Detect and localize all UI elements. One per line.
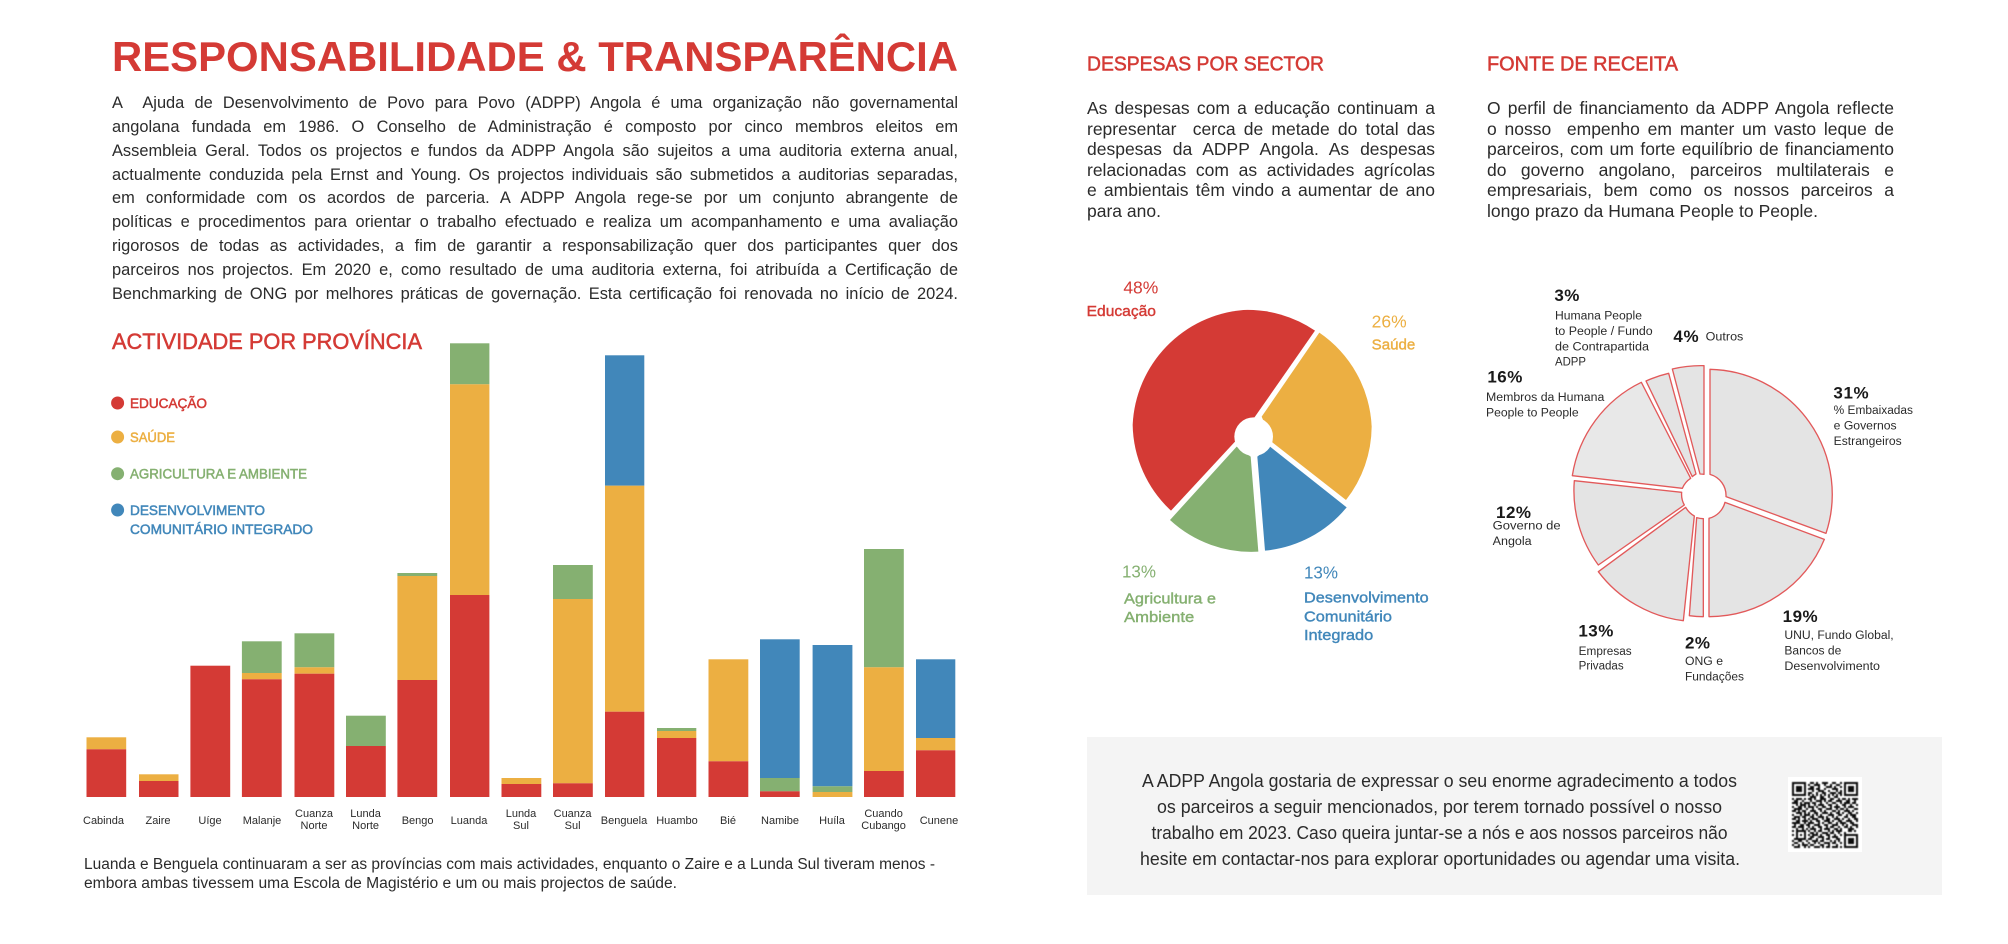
- label: 3% humana people to people: de Contrapartida: [1555, 339, 1649, 353]
- text block: despesas: e ambientais têm vindo a aumentar de ano: [1087, 180, 1435, 200]
- province axis labels: Uíge: [198, 815, 222, 827]
- thank-you text: trabalho em 2023. Caso queira juntar-se a nós e aos nossos parceiros não: [1152, 823, 1728, 843]
- label: 3% humana people to people: to People / Fundo: [1555, 324, 1653, 338]
- label: desenvolvimento comunitario integrado: 13%: [1304, 562, 1338, 582]
- bar: Cunene: [916, 659, 955, 797]
- label: educacao: Educação: [1087, 303, 1156, 320]
- label: 4% outros: [1673, 327, 1743, 346]
- heading: despesas por sector: DESPESAS POR SECTOR: [1087, 54, 1324, 76]
- text block: despesas: [1087, 98, 1435, 221]
- thank-you text: os parceiros a seguir mencionados, por terem tornado possível o nosso: [1157, 797, 1722, 817]
- label: 4% outros: 4%: [1673, 327, 1699, 346]
- province axis labels: Cunene: [920, 815, 958, 827]
- label: 2% ONG: ONG e: [1685, 654, 1723, 668]
- province axis labels: Lunda: [506, 808, 537, 820]
- label: saude: [1372, 312, 1415, 353]
- province axis labels: Lunda: [350, 808, 382, 820]
- centre hole: [1234, 417, 1273, 456]
- province axis labels: Cuanza: [295, 808, 334, 820]
- province axis labels: Benguela: [601, 815, 648, 827]
- label: agricultura e ambiente: Ambiente: [1124, 609, 1194, 626]
- province axis labels: Huíla: [819, 815, 846, 827]
- label: 13% empresas: [1578, 622, 1632, 672]
- slice: educacao 48%: [1133, 310, 1315, 511]
- label: 16% membros: 16%: [1487, 368, 1522, 387]
- province axis labels: Cuanza: [554, 808, 592, 820]
- pie chart: fonte de receita: [1486, 286, 1913, 684]
- slice: desenvolvimento 13%: [1257, 447, 1347, 551]
- slice: 19% UNU: [1709, 502, 1824, 617]
- label: 12% governo: Angola: [1493, 534, 1532, 548]
- thank-you text: A ADPP Angola gostaria de expressar o seu enorme agradecimento a todos: [1142, 771, 1737, 791]
- text block: fonte de receita: [1487, 98, 1894, 221]
- province axis labels: Luanda: [451, 815, 488, 827]
- province axis labels: Bengo: [402, 815, 434, 827]
- thank-you text: hesite em contactar-nos para explorar oportunidades ou agendar uma visita.: [1140, 849, 1740, 869]
- label: 12% governo: Governo de: [1493, 519, 1561, 533]
- pie chart: despesas por sector: [1087, 277, 1429, 644]
- intro text block: rigorosos de todas as actividades, a fim de garantir a responsabilização quer dos participantes quer dos: [112, 237, 958, 255]
- label: 19% UNU: 19%: [1783, 607, 1818, 626]
- label: 16% membros: [1486, 368, 1605, 419]
- label: desenvolvimento comunitario integrado: Integrado: [1304, 627, 1373, 644]
- intro text block: políticas e procedimentos para orientar o trabalho efectuado e realiza um acompanhamento e uma avaliação: [112, 213, 958, 231]
- province axis labels: Huambo: [656, 815, 698, 827]
- bar: Malanje: [242, 641, 282, 797]
- slice: 2% ONG: [1689, 518, 1703, 617]
- bar: Zaire: [139, 774, 178, 797]
- stacked bar chart: activity by province: [86, 343, 955, 797]
- bar: Bengo: [397, 573, 437, 797]
- label: 4% outros: Outros: [1706, 330, 1743, 344]
- label: 2% ONG: Fundações: [1685, 670, 1744, 684]
- chart caption: Luanda e Benguela continuaram a ser as províncias com mais actividades, enquanto o Zaire e a Lunda Sul tiveram menos -: [84, 856, 935, 873]
- label: desenvolvimento comunitario integrado: Comunitário: [1304, 608, 1392, 625]
- legend item: agricultura e ambiente: AGRICULTURA E AMBIENTE: [130, 466, 307, 482]
- label: agricultura e ambiente: 13%: [1122, 562, 1156, 582]
- intro text block: Benchmarking de ONG por melhores práticas de governação. Esta certificação foi renovada no início de 2024.: [112, 285, 958, 303]
- text block: despesas: representar cerca de metade do total das: [1087, 119, 1435, 139]
- text block: fonte de receita: longo prazo da Humana People to People.: [1487, 201, 1818, 221]
- bar: Cuanza Norte: [294, 633, 334, 797]
- intro text block: A Ajuda de Desenvolvimento de Povo para Povo (ADPP) Angola é uma organização não governamental: [112, 94, 958, 112]
- province axis labels: Cuando: [864, 808, 903, 820]
- label: 16% membros: People to People: [1486, 405, 1579, 419]
- label: 2% ONG: [1685, 634, 1744, 684]
- province axis labels: Cabinda: [83, 815, 125, 827]
- intro text block: actualmente conduzida pela Ernst and Young. Os projectos individuais são submetidos a auditorias separadas,: [112, 166, 958, 184]
- label: desenvolvimento comunitario integrado: [1304, 562, 1429, 644]
- slices: [1572, 366, 1832, 621]
- province axis labels: Namibe: [761, 815, 799, 827]
- label: educacao: [1087, 277, 1158, 320]
- chart caption: [84, 856, 935, 892]
- bar: Cuando Cubango: [864, 549, 904, 797]
- panel: thank-you box: [1087, 737, 1942, 895]
- province axis labels: Zaire: [145, 815, 171, 827]
- bar: Uige: [190, 666, 230, 797]
- slice: 16% membros: [1572, 382, 1691, 488]
- label: 3% humana people to people: [1554, 286, 1653, 369]
- label: agricultura e ambiente: Agricultura e: [1124, 591, 1216, 608]
- bar: Namibe: [760, 639, 800, 797]
- text block: despesas: relacionadas com as actividades agrícolas: [1087, 160, 1435, 180]
- intro text block: em conformidade com os acordos de parceria. A ADPP Angola rege-se por um conjunto abrangente de: [112, 189, 958, 207]
- legend item: desenvolvimento comunitario integrado: [111, 503, 313, 537]
- label: agricultura e ambiente: [1122, 562, 1216, 626]
- bar: Cuanza Sul: [553, 565, 593, 797]
- label: 12% governo: [1493, 503, 1561, 548]
- label: 3% humana people to people: ADPP: [1555, 355, 1586, 369]
- province axis labels: Norte: [352, 820, 379, 832]
- label: 13% empresas: 13%: [1578, 622, 1613, 641]
- label: 12% governo: 12%: [1496, 503, 1531, 522]
- label: 19% UNU: [1783, 607, 1894, 673]
- province axis labels: Bié: [720, 815, 736, 827]
- slice: saude 26%: [1262, 333, 1372, 500]
- province axis labels: Sul: [513, 820, 529, 832]
- province axis labels: Malanje: [243, 815, 281, 827]
- province axis labels: Norte: [301, 820, 327, 832]
- label: saude: 26%: [1372, 312, 1407, 332]
- slice: agricultura 13%: [1170, 447, 1258, 552]
- text block: fonte de receita: parceiros, com um forte equilíbrio de financiamento: [1487, 139, 1894, 159]
- bar: Benguela: [605, 355, 644, 797]
- bar: Luanda: [450, 343, 489, 797]
- label: 19% UNU: Desenvolvimento: [1784, 659, 1880, 673]
- label: 31% embaixadas: [1833, 383, 1913, 448]
- label: desenvolvimento comunitario integrado: Desenvolvimento: [1304, 590, 1429, 607]
- province axis labels: [83, 808, 958, 832]
- intro text block: parceiros nos projectos. Em 2020 e, como resultado de uma auditoria externa, foi atribuída a Certificação de: [112, 261, 958, 279]
- title: RESPONSABILIDADE & TRANSPARÊNCIA: [112, 32, 958, 80]
- province axis labels: Sul: [565, 820, 581, 832]
- label: educacao: 48%: [1123, 277, 1158, 297]
- thank-you text: [1140, 771, 1740, 869]
- label: 31% embaixadas: % Embaixadas: [1834, 403, 1913, 417]
- label: 19% UNU: Bancos de: [1784, 644, 1842, 658]
- heading: fonte de receita: FONTE DE RECEITA: [1487, 54, 1679, 76]
- label: 2% ONG: 2%: [1685, 634, 1710, 653]
- slice: 4% outros: [1672, 366, 1704, 474]
- province axis labels: Cubango: [861, 820, 906, 832]
- intro text block: [112, 94, 958, 303]
- intro text block: angolana fundada em 1986. O Conselho de Administração é composto por cinco membros eleitos em: [112, 118, 958, 136]
- text block: fonte de receita: do governo angolano, parceiros multilaterais e: [1487, 160, 1894, 180]
- slice: 31% embaixadas: [1710, 369, 1832, 533]
- label: saude: Saúde: [1372, 336, 1415, 353]
- legend item: educacao: EDUCAÇÃO: [130, 396, 207, 411]
- icon: QR code: [1788, 777, 1862, 852]
- slice: 3% humana: [1646, 373, 1696, 477]
- label: 19% UNU: UNU, Fundo Global,: [1784, 628, 1894, 642]
- legend item: saude: [111, 430, 175, 445]
- bar: Bie: [708, 659, 748, 797]
- bar: Lunda Sul: [502, 778, 541, 797]
- intro text block: Assembleia Geral. Todos os projectos e fundos da ADPP Angola são sujeitos a uma auditoria externa anual,: [112, 142, 958, 160]
- bar: Lunda Norte: [346, 716, 386, 797]
- bar: Huila: [813, 645, 852, 797]
- bar: Huambo: [657, 728, 696, 797]
- label: 13% empresas: Empresas: [1579, 644, 1632, 658]
- label: 13% empresas: Privadas: [1579, 658, 1624, 672]
- text block: fonte de receita: empresariais, bem como os nossos parceiros a: [1487, 180, 1894, 200]
- text block: despesas: para ano.: [1087, 201, 1161, 221]
- legend item: desenvolvimento comunitario integrado: DESENVOLVIMENTO: [130, 503, 265, 518]
- legend item: desenvolvimento comunitario integrado: COMUNITÁRIO INTEGRADO: [130, 522, 313, 537]
- heading: actividade por provincia: ACTIVIDADE POR PROVÍNCIA: [112, 329, 422, 354]
- label: 31% embaixadas: Estrangeiros: [1834, 434, 1902, 448]
- bar: Cabinda: [86, 737, 126, 797]
- text block: fonte de receita: o nosso empenho em manter um vasto leque de: [1487, 119, 1894, 139]
- text block: despesas: As despesas com a educação continuam a: [1087, 98, 1435, 118]
- label: 31% embaixadas: e Governos: [1834, 418, 1897, 432]
- legend item: saude: SAÚDE: [130, 430, 175, 445]
- chart caption: embora ambas tivessem uma Escola de Magistério e um ou mais projectos de saúde.: [84, 875, 677, 892]
- label: 3% humana people to people: 3%: [1554, 286, 1579, 305]
- text block: despesas: despesas da ADPP Angola. As despesas: [1087, 139, 1435, 159]
- label: 3% humana people to people: Humana People: [1555, 308, 1642, 322]
- label: 16% membros: Membros da Humana: [1486, 390, 1605, 404]
- slice: 13% empresas: [1598, 507, 1694, 621]
- text block: fonte de receita: O perfil de financiamento da ADPP Angola reflecte: [1487, 98, 1894, 118]
- slice: 12% governo: [1574, 481, 1684, 565]
- label: 31% embaixadas: 31%: [1833, 383, 1869, 402]
- legend: [111, 396, 313, 537]
